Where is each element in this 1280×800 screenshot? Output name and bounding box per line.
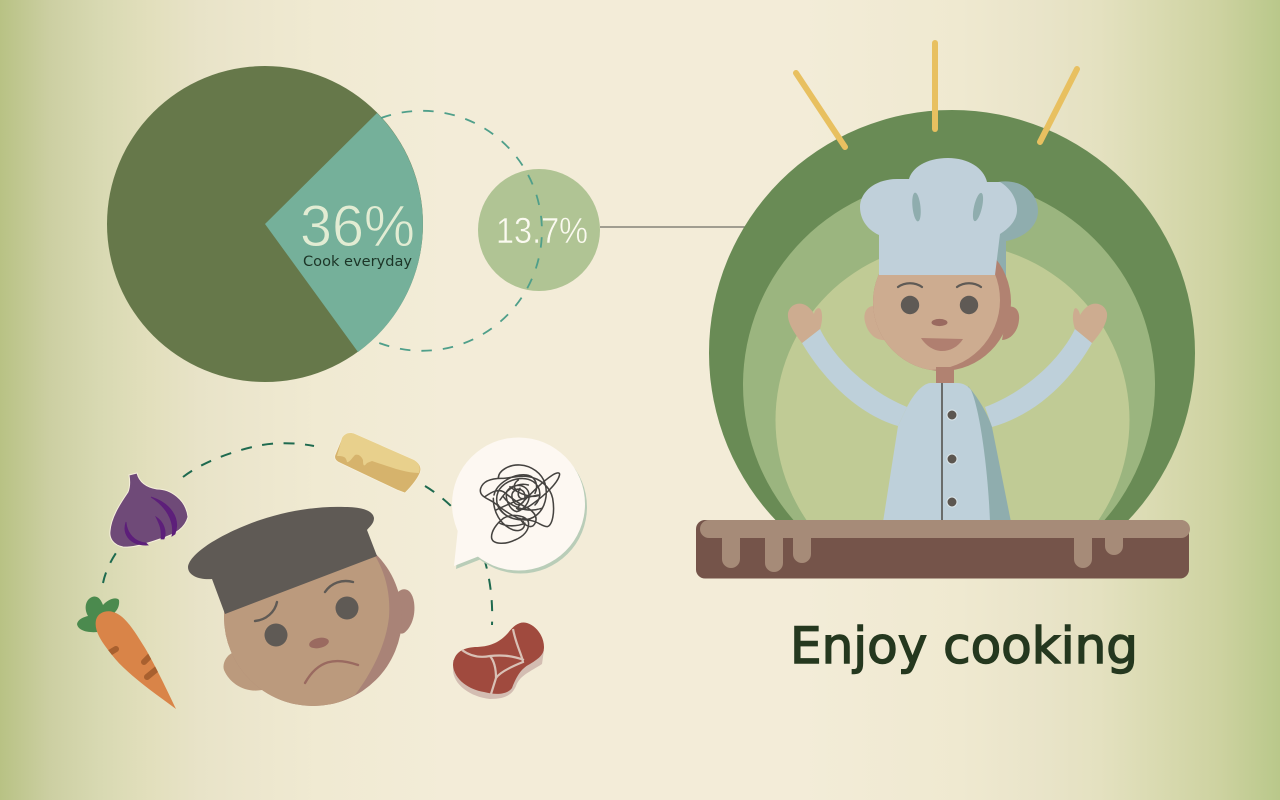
- left hand: [788, 304, 822, 343]
- left eye: [264, 624, 288, 646]
- face: [224, 528, 402, 706]
- frown: [305, 661, 358, 683]
- icon: onion: [110, 473, 188, 547]
- inner circle: [776, 252, 1130, 520]
- icon: radiating rays: [796, 43, 1077, 147]
- eyebrows: [255, 581, 353, 621]
- left ear: [223, 653, 268, 691]
- jacket placket: [941, 383, 943, 521]
- middle circle: [743, 198, 1155, 520]
- left arm: [802, 329, 907, 426]
- pie highlighted slice: [265, 113, 423, 352]
- right eye: [336, 596, 358, 620]
- percentage 13.7%: 13.7%: [496, 210, 588, 251]
- left ear: [864, 306, 886, 340]
- dashed arc linking pie and 13.7%: [370, 111, 542, 351]
- right ear: [396, 589, 414, 634]
- sad cook head: [188, 507, 414, 720]
- tangled scribble: [480, 465, 560, 543]
- right ear: [1002, 307, 1019, 340]
- icon: butter: [335, 433, 421, 493]
- hat: [860, 158, 1017, 275]
- nose: [932, 319, 948, 326]
- circle: 13.7%: [478, 169, 600, 291]
- nose: [308, 636, 330, 650]
- neck: [936, 367, 954, 383]
- bubble shadow: [454, 440, 587, 574]
- carrot root: [96, 611, 176, 709]
- happy chef: [788, 158, 1107, 522]
- caption: cook everyday: Cook everyday: [303, 254, 412, 270]
- pie remainder slice: [107, 66, 423, 382]
- eyebrows: [898, 283, 981, 287]
- left hat pleat: [912, 192, 921, 222]
- bubble: [452, 438, 585, 570]
- jacket shadow: [968, 386, 1011, 522]
- icon: steak: [453, 622, 544, 699]
- face: [873, 260, 1011, 371]
- outer circle: [709, 110, 1195, 520]
- heading: enjoy cooking: Enjoy cooking: [790, 617, 1138, 675]
- right hand: [1073, 304, 1107, 343]
- right eye: [960, 296, 978, 314]
- right arm: [985, 329, 1092, 427]
- concentric green backdrop: [709, 110, 1195, 520]
- right hat pleat: [973, 193, 983, 222]
- pie chart: 36% cook everyday: [107, 66, 423, 382]
- buttons: [947, 410, 957, 507]
- smile: [921, 338, 963, 351]
- percentage 36%: 36%: [300, 194, 415, 259]
- jacket: [883, 383, 990, 522]
- table top with drips: [700, 520, 1190, 572]
- dashed arc around sad cook: [103, 443, 492, 625]
- table: [696, 520, 1190, 578]
- left eye: [901, 296, 919, 314]
- connector line to chef: [600, 226, 746, 228]
- table base: [696, 520, 1189, 578]
- hat: [188, 507, 377, 614]
- hat shadow: [995, 181, 1038, 276]
- icon: carrot: [77, 597, 176, 709]
- speech bubble with scribble: [452, 438, 587, 574]
- carrot leaves: [77, 597, 119, 632]
